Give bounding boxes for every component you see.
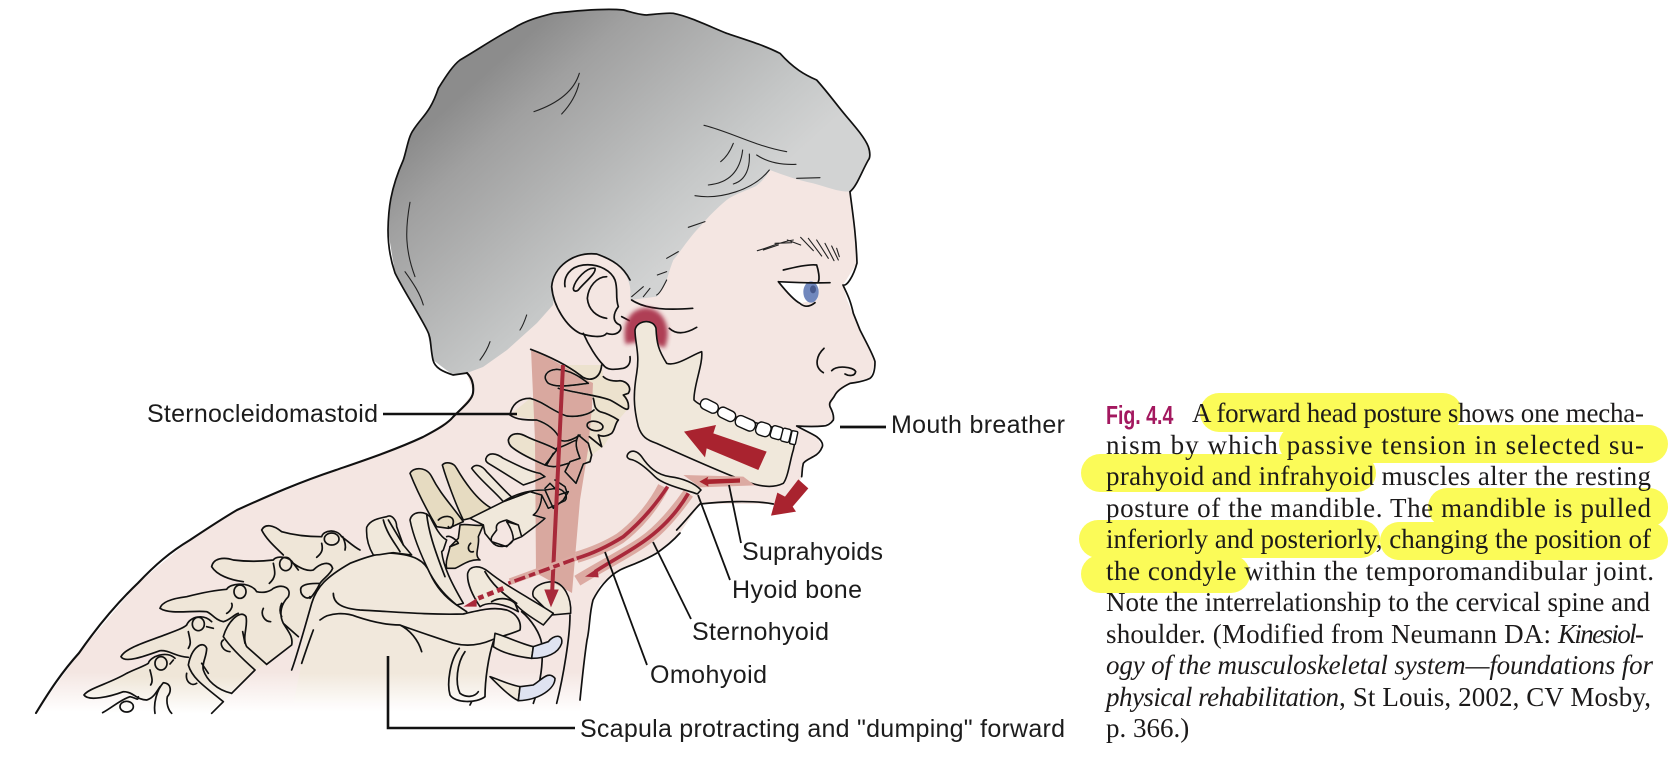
rib cage edges <box>470 612 570 705</box>
arm loop <box>449 642 493 701</box>
figure number: Fig. 4.4 <box>1106 400 1174 430</box>
caption text <box>1104 398 1654 743</box>
omohyoid line <box>577 487 668 558</box>
jaw joint glow <box>632 316 660 345</box>
mandible group <box>627 300 856 516</box>
neck front and back outline <box>36 373 680 713</box>
yellow highlights <box>1079 393 1668 593</box>
caption text: the condyle within the temporomandibular joint. <box>1106 556 1654 586</box>
caption text: prahyoid and infrahyoid muscles alter the resting <box>1106 461 1651 491</box>
scapula <box>297 553 520 700</box>
caption text: inferiorly and posteriorly, changing the position of <box>1106 524 1651 554</box>
caption text: Kinesiol- <box>1557 619 1644 649</box>
face profile <box>677 192 875 530</box>
teeth <box>699 397 798 445</box>
rib with cartilage upper <box>493 633 562 658</box>
label: Omohyoid: Omohyoid <box>650 661 767 689</box>
caption text: , St Louis, 2002, CV Mosby, <box>1339 682 1651 712</box>
caption text: A forward head posture shows one mecha- <box>1192 398 1644 428</box>
neck base vertebrae <box>410 454 566 568</box>
hyoid bone <box>627 451 701 494</box>
icon: eye <box>778 265 830 306</box>
jaw retraction arrow <box>684 425 767 470</box>
skull base under ear <box>583 333 630 369</box>
ear <box>552 254 633 336</box>
suprahyoid arrow <box>699 477 740 487</box>
ear and skull base <box>552 254 633 369</box>
caption text: posture of the mandible. The mandible is pulled <box>1106 493 1652 523</box>
mandible <box>634 322 797 486</box>
hair <box>388 9 870 375</box>
suprahyoid pink band <box>683 475 755 487</box>
caption text: shoulder. (Modified from Neumann DA: <box>1106 619 1551 649</box>
upper thoracic vertebrae <box>84 526 360 713</box>
cheek lines <box>632 300 697 333</box>
label: Suprahyoids: Suprahyoids <box>742 538 883 566</box>
caption text: Note the interrelationship to the cervical spine and <box>1106 587 1650 617</box>
caption text: ogy of the musculoskeletal system—foundations for <box>1106 650 1653 680</box>
label: Mouth breather: Mouth breather <box>891 411 1065 439</box>
body and face skin <box>36 160 875 713</box>
rib with cartilage lower <box>490 675 555 701</box>
nose nostril <box>817 348 856 375</box>
upper scapula bars <box>367 513 463 605</box>
caption text: nism by which passive tension in selected su- <box>1106 430 1644 460</box>
head outline <box>388 9 870 375</box>
label: Scapula: Scapula protracting and "dumping" forward <box>580 715 1065 743</box>
eye and brow <box>757 237 839 306</box>
label: Hyoid bone: Hyoid bone <box>732 576 862 604</box>
hair strands <box>405 73 820 360</box>
caption text: p. 366.) <box>1106 713 1189 743</box>
jaw depression arrow <box>771 479 808 516</box>
shoulder, scapula and ribs <box>292 454 571 705</box>
omohyoid band <box>577 487 663 557</box>
sternocleidomastoid arrow <box>545 365 563 606</box>
figure caption <box>1079 393 1668 743</box>
caption text: physical rehabilitation <box>1104 682 1339 712</box>
sternocleidomastoid muscle band <box>531 349 593 593</box>
acromion <box>468 567 553 625</box>
sternum <box>533 582 571 615</box>
infrahyoid muscles <box>463 487 688 607</box>
label: Sternocleidomastoid: Sternocleidomastoid <box>147 400 378 428</box>
leader lines <box>383 414 886 728</box>
upper cervical vertebrae <box>508 349 630 508</box>
eyebrow <box>757 237 839 261</box>
sternohyoid arrow <box>585 493 688 577</box>
neck front line <box>677 502 773 530</box>
omohyoid dashed arrow <box>463 559 574 607</box>
label: Sternohyoid: Sternohyoid <box>692 618 829 646</box>
sternohyoid band <box>577 493 688 581</box>
